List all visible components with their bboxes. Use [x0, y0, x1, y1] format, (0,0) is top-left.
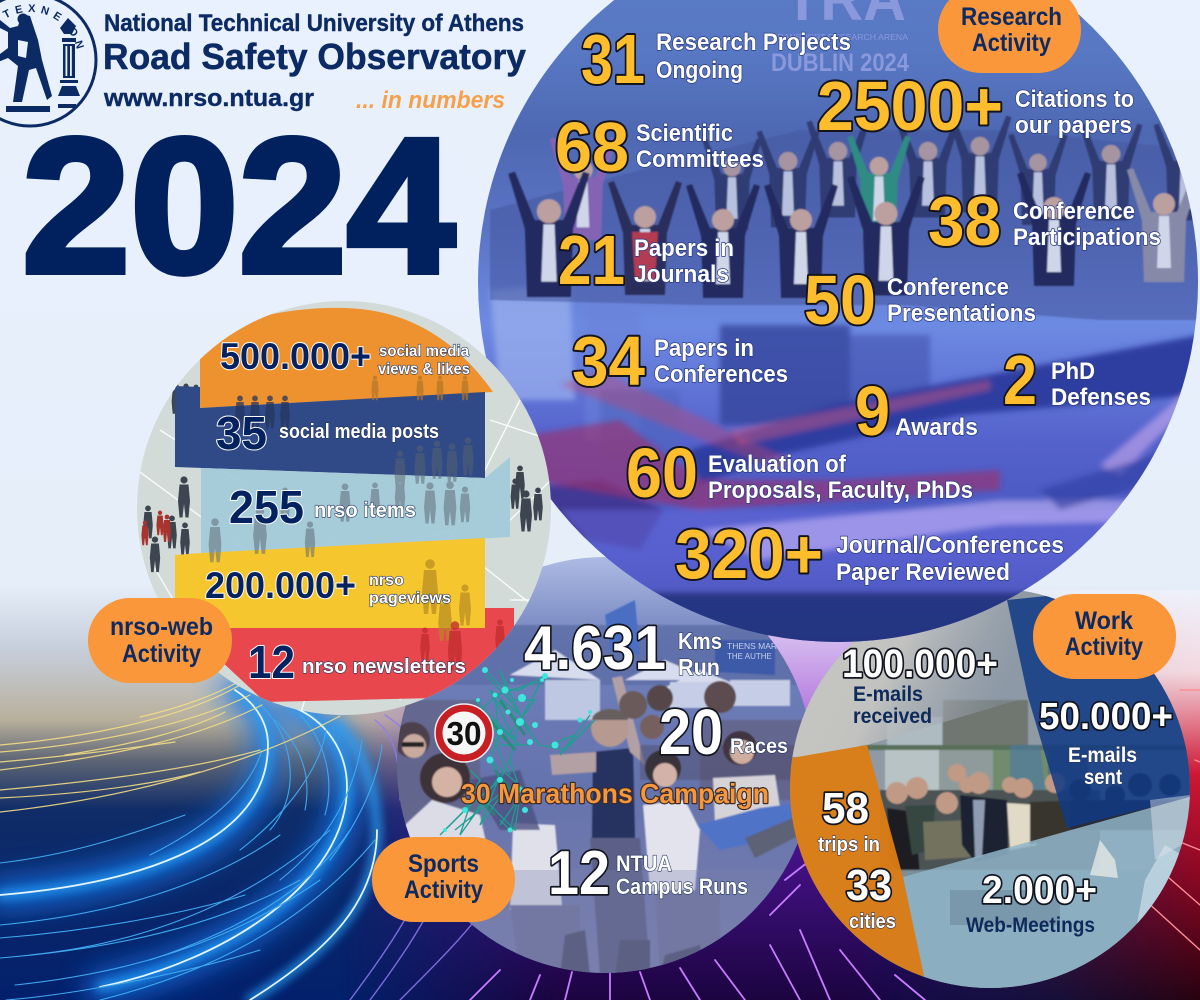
header: observatory name: Road Safety Observatory [103, 36, 526, 77]
stat: conference presentations: Conference [887, 274, 1009, 301]
stat: papers in journals: Journals [634, 261, 729, 288]
stat: papers reviewed: Paper Reviewed [836, 559, 1010, 586]
header: university name: National Technical University of Athens [104, 10, 524, 37]
stat: nrso pageviews: pageviews [369, 590, 451, 607]
stat: campus runs: Campus Runs [616, 874, 748, 899]
title: 2024: 2024 [22, 98, 455, 313]
web crowd photo circle with coloured bands [137, 301, 551, 715]
pill: nrso-web activity [88, 598, 232, 683]
header: website: www.nrso.ntua.gr [103, 85, 314, 112]
stat: cities: cities [849, 911, 896, 933]
stat: phd defenses [1003, 341, 1151, 419]
stat: conference presentations: 50 [804, 261, 876, 339]
stat: kms run: 4.631 [524, 614, 666, 683]
stat: conference presentations [804, 261, 1036, 339]
stat: social media posts: social media posts [279, 421, 439, 443]
stat: web meetings: 2.000+ [982, 869, 1097, 912]
bridge and road streaks [500, 335, 1200, 650]
work photo circle [780, 580, 1200, 1000]
stat: papers in journals: 21 [558, 221, 625, 299]
stat: scientific committees: Scientific [636, 120, 733, 147]
stat: evaluations: Proposals, Faculty, PhDs [708, 477, 973, 504]
header: in numbers: ... in numbers [356, 87, 505, 114]
stat: web meetings [966, 869, 1097, 937]
band: red [220, 608, 514, 702]
sports photo circle: THENS MAR [727, 641, 777, 651]
stat: phd defenses: Defenses [1051, 384, 1151, 411]
stat: awards: Awards [895, 414, 978, 441]
stat: nrso items [229, 481, 416, 533]
pill: research activity: Activity [972, 29, 1051, 57]
band: orange [200, 308, 493, 408]
stat: citations: 2500+ [817, 67, 1003, 145]
stat: e-mails sent [1039, 696, 1173, 789]
pill: nrso-web activity: nrso-web [110, 613, 213, 641]
stat: races: Races [730, 735, 788, 758]
stat: evaluations: 60 [626, 434, 698, 512]
stat: races: 20 [659, 696, 723, 768]
research photo circle [478, 0, 1200, 650]
stat: evaluations [626, 434, 973, 512]
stat: trips: trips in [818, 834, 880, 856]
left women [394, 722, 430, 758]
stat: research projects ongoing [581, 20, 851, 98]
stat: kms run: Kms [678, 628, 722, 654]
stat: nrso newsletters: nrso newsletters [302, 656, 466, 678]
sports photo circle: THE AUTHE [727, 652, 772, 661]
pill: work activity [1033, 594, 1176, 679]
stat: social media posts [216, 407, 439, 459]
pill: sports activity: Activity [404, 876, 483, 904]
header: university logo seal [0, 0, 110, 145]
stat: papers reviewed: Journal/Conferences [836, 532, 1064, 559]
band: yellow [175, 538, 485, 628]
TRA 2024 banner: DUBLIN 2024 [771, 49, 909, 77]
background light-trail arcs [0, 682, 1200, 1000]
stat: scientific committees: 68 [555, 108, 629, 186]
campaign heading: 30 Marathons Campaign [461, 778, 769, 809]
stat: nrso pageviews: nrso [369, 572, 404, 589]
stat: social media views: 500.000+ [220, 336, 371, 377]
stat: scientific committees [555, 108, 764, 186]
stat: conference participations: Conference [1013, 198, 1135, 225]
pill: nrso-web activity: Activity [122, 640, 201, 668]
stat: campus runs [548, 839, 748, 908]
icon: teal running figure network [440, 667, 595, 835]
stat: conference participations [928, 182, 1161, 260]
stat: papers in conferences: Conferences [654, 361, 788, 388]
stat: papers in conferences: 34 [572, 322, 645, 400]
pill: research activity [938, 0, 1081, 73]
stat: nrso newsletters: 12 [248, 636, 295, 688]
panel: nrso-web activity [88, 301, 551, 715]
orange sector: trips [790, 745, 924, 977]
stat: phd defenses: 2 [1003, 341, 1037, 419]
stat: citations [817, 67, 1134, 145]
stat: nrso items: 255 [229, 481, 304, 533]
stat: papers in journals: Papers in [634, 235, 734, 262]
pill: sports activity: Sports [408, 850, 479, 878]
stat: nrso pageviews [205, 565, 451, 607]
stat: research projects ongoing: Ongoing [656, 57, 743, 84]
stat: e-mails received: received [853, 705, 932, 728]
icon: 30 speed limit sign: 30 [446, 715, 482, 752]
light blue sector: web meetings [903, 796, 1190, 988]
stat: conference participations: Participations [1013, 224, 1161, 251]
stat: research projects ongoing: Research Projects [656, 29, 851, 56]
stat: cities: 33 [846, 861, 892, 910]
stat: nrso pageviews: 200.000+ [205, 565, 356, 606]
stat: e-mails sent: sent [1084, 766, 1122, 789]
stat: evaluations: Evaluation of [708, 451, 847, 478]
stat: scientific committees: Committees [636, 146, 764, 173]
icon: 30 speed limit sign [435, 704, 493, 762]
stat: citations: our papers [1015, 112, 1132, 139]
stat: awards: 9 [855, 372, 890, 450]
city buildings [488, 288, 932, 436]
stat: nrso newsletters [248, 636, 466, 688]
stat: social media posts: 35 [216, 407, 267, 459]
stat: kms run: Run [678, 654, 720, 680]
stat: papers reviewed: 320+ [675, 515, 823, 593]
background: purple lower centre [368, 635, 1000, 1000]
stat: social media views: views & likes [378, 361, 470, 378]
TRA 2024 banner: TRANSPORT RESEARCH ARENA [772, 32, 908, 42]
panel: sports activity [394, 555, 815, 975]
stat: cities [846, 861, 896, 933]
stat: research projects ongoing: 31 [581, 20, 645, 98]
stat: nrso items: nrso items [314, 499, 416, 522]
background: red lower right [916, 590, 1200, 1000]
stat: conference presentations: Presentations [887, 300, 1036, 327]
stat: papers in journals [558, 221, 734, 299]
stat: papers in conferences [572, 322, 788, 400]
sports photo circle [394, 555, 815, 975]
panel: research activity [478, 0, 1200, 650]
TRA 2024 banner [771, 0, 909, 77]
band: navy [175, 386, 485, 478]
pill: research activity: Research [961, 3, 1062, 31]
panel: work activity [780, 580, 1200, 1000]
pill: sports activity [372, 837, 515, 922]
blue sector: e-mails sent [1007, 596, 1190, 828]
stat: campus runs: NTUA [616, 851, 672, 876]
stat: e-mails sent: E-mails [1068, 744, 1137, 767]
stat: e-mails received: E-mails [853, 683, 923, 706]
stat: trips: 58 [822, 784, 869, 833]
stat: campus runs: 12 [548, 839, 610, 908]
pill: work activity: Work [1075, 607, 1133, 635]
runner [592, 748, 635, 838]
grey sector: e-mails received [792, 599, 1018, 757]
stat: phd defenses: PhD [1051, 358, 1095, 385]
stat: papers in conferences: Papers in [654, 335, 754, 362]
stat: e-mails sent: 50.000+ [1039, 696, 1173, 738]
conference team photo [490, 116, 1200, 320]
stat: races [659, 696, 788, 768]
stat: social media views: social media [379, 343, 469, 360]
stat: papers reviewed [675, 515, 1064, 593]
stat: e-mails received [842, 642, 998, 728]
stat: conference participations: 38 [928, 182, 1001, 260]
band: light blue [201, 457, 510, 553]
stat: awards [855, 372, 978, 450]
pill: work activity: Activity [1065, 633, 1143, 661]
stat: citations: Citations to [1015, 86, 1134, 113]
stat: trips [818, 784, 880, 856]
stat: social media views [220, 336, 470, 378]
stat: e-mails received: 100.000+ [842, 642, 998, 686]
stat: web meetings: Web-Meetings [966, 914, 1095, 937]
